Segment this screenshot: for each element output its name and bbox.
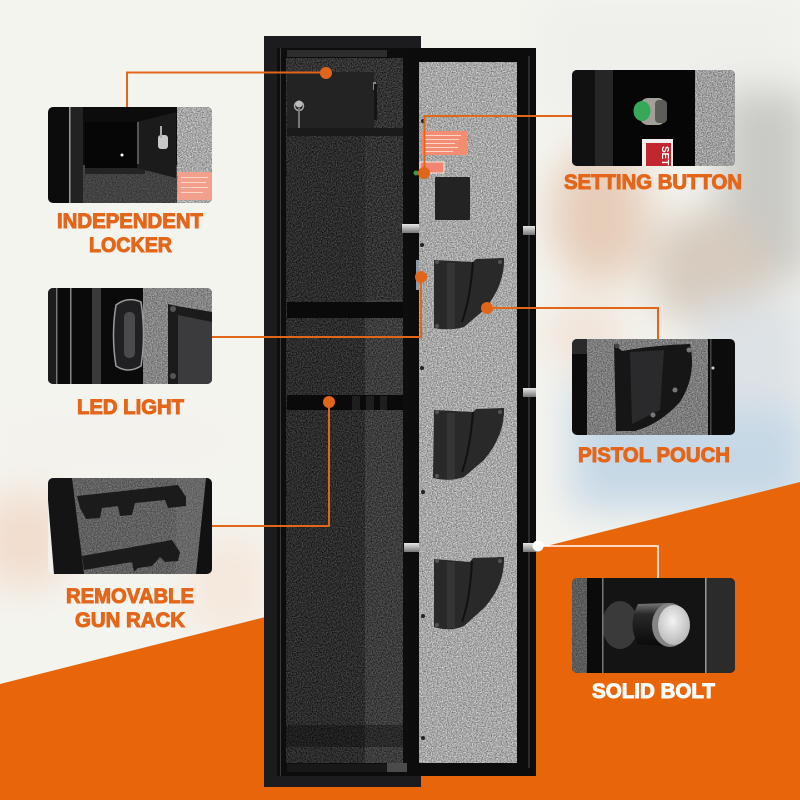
independent locker box xyxy=(287,72,403,136)
green button xyxy=(634,98,667,125)
panel: independent locker photo xyxy=(48,107,212,203)
panel: LED light photo xyxy=(48,288,212,384)
green setting button xyxy=(414,170,418,176)
callout: solid bolt xyxy=(532,540,658,579)
locking bolts xyxy=(402,224,537,552)
heading: independent locker: LOCKER xyxy=(89,234,172,257)
door felt lining xyxy=(419,62,517,763)
lower gun rack xyxy=(287,395,403,410)
callout: LED light xyxy=(212,271,427,337)
heading: LED light: LED LIGHT xyxy=(77,396,184,419)
panel: removable gun rack photo xyxy=(48,478,212,574)
pistol pouch 2 xyxy=(433,408,504,480)
callout: pistol pouch xyxy=(481,302,658,340)
locker key xyxy=(294,100,304,128)
heading: removable gun rack: REMOVABLE xyxy=(66,585,194,608)
heading: independent locker xyxy=(57,210,203,257)
set sticker: SET xyxy=(659,146,670,165)
callout: setting button xyxy=(418,116,573,179)
upper rack xyxy=(77,485,186,519)
heading: solid bolt: SOLID BOLT xyxy=(592,680,715,703)
pouch xyxy=(614,344,692,431)
heading: independent locker: INDEPENDENT xyxy=(57,210,203,233)
pistol pouch 1 xyxy=(434,258,504,329)
LED strip xyxy=(416,260,419,290)
setting label xyxy=(420,162,444,173)
upper gun rack xyxy=(287,302,403,318)
heading: setting button: SETTING BUTTON xyxy=(564,171,742,194)
panel: pistol pouch photo xyxy=(572,339,735,435)
safe body xyxy=(264,36,421,787)
safe interior back wall xyxy=(286,58,403,763)
lower rack xyxy=(82,540,180,572)
black battery box xyxy=(435,177,470,220)
orange diagonal background xyxy=(0,482,800,800)
heading: removable gun rack xyxy=(66,585,194,632)
warning label xyxy=(422,131,467,155)
heading: removable gun rack: GUN RACK xyxy=(75,609,185,632)
panel: setting button photo xyxy=(572,70,735,169)
set sticker xyxy=(642,139,673,166)
panel: solid bolt photo xyxy=(572,578,735,673)
LED lens xyxy=(114,300,144,370)
callout: removable gun rack xyxy=(212,396,335,526)
bolt cylinder xyxy=(632,603,690,647)
callout: independent locker xyxy=(127,67,332,108)
open door xyxy=(402,48,537,776)
heading: pistol pouch: PISTOL POUCH xyxy=(578,444,730,467)
pistol pouch 3 xyxy=(434,557,504,629)
door rivets xyxy=(420,119,425,740)
